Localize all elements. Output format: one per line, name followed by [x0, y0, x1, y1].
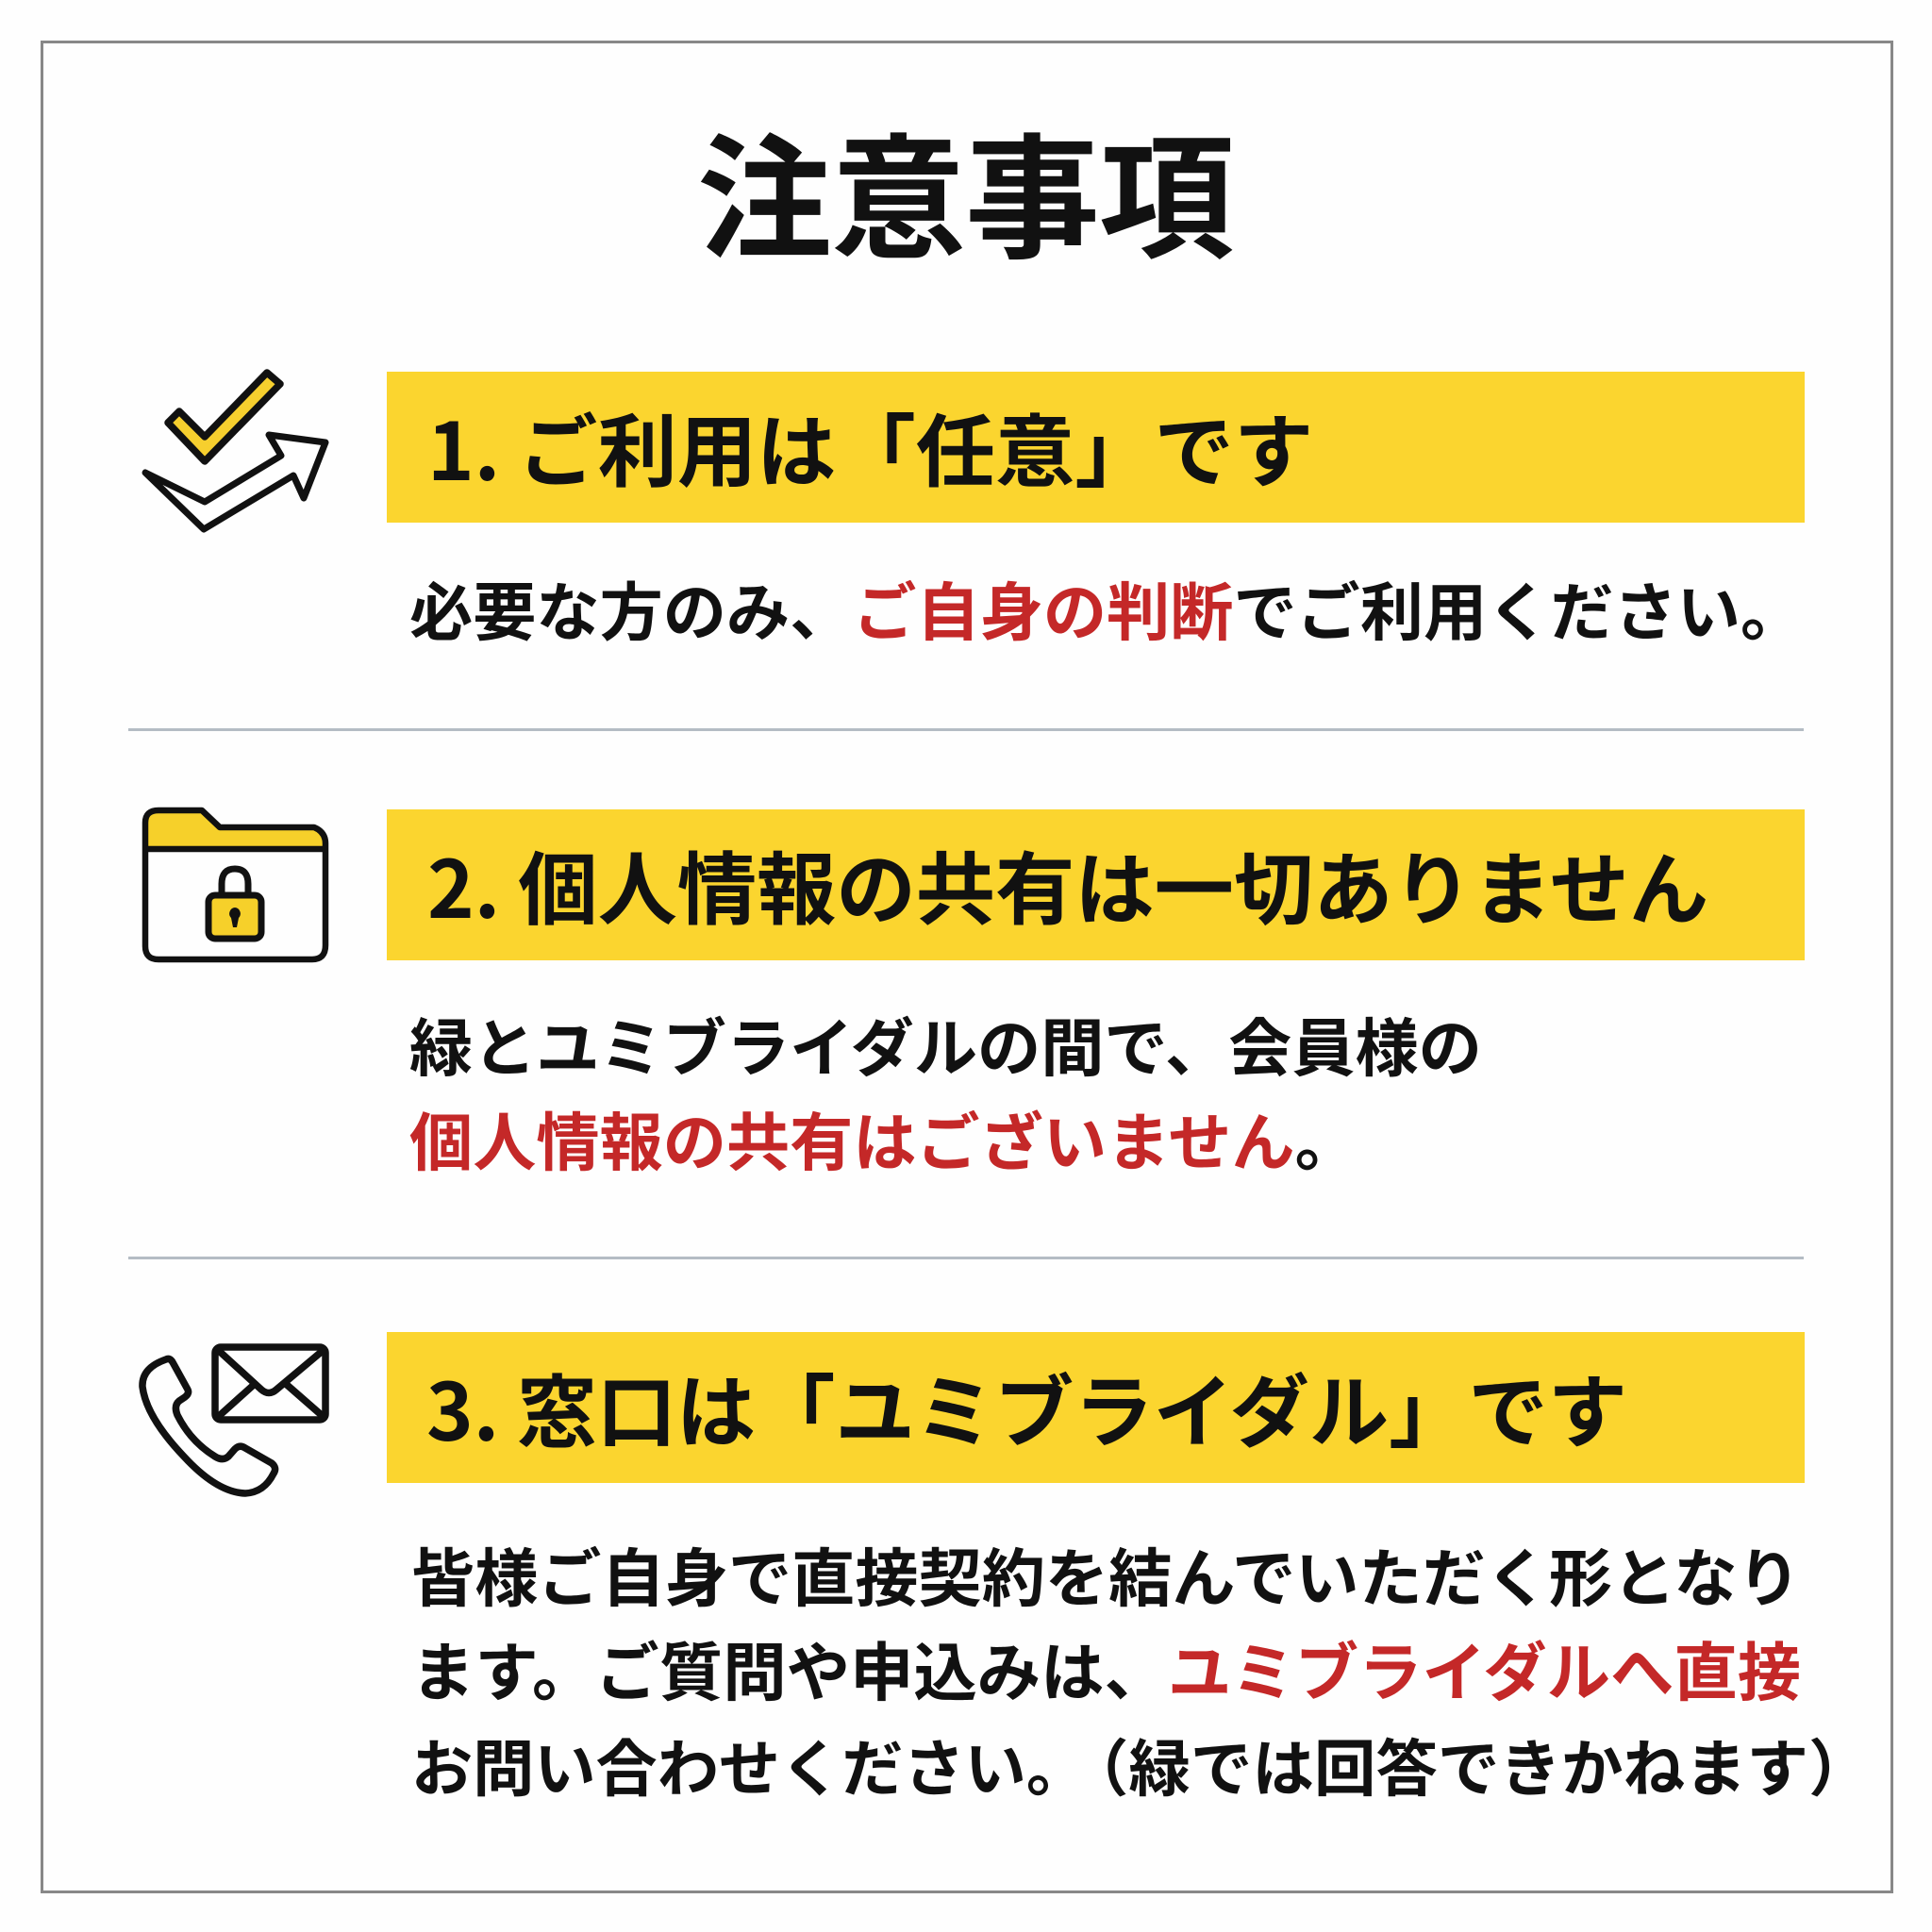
- heading 1: 1. ご利用は「任意」です: [427, 389, 1313, 504]
- heading bar 1: [387, 372, 1805, 523]
- heading bar 2: [387, 809, 1805, 960]
- body text 2: 緑とユミブライダルの間で、会員様の: [409, 1014, 1482, 1085]
- heading 3: 3. 窓口は「ユミブライダル」です: [426, 1349, 1627, 1464]
- title: 注意事項: [697, 92, 1233, 287]
- icon: phone and envelope: [139, 1343, 329, 1497]
- body text 2: [409, 1014, 1482, 1179]
- body text 3: お問い合わせください。: [411, 1735, 1088, 1804]
- body text 3: ます。ご質問や申込みは、ユミブライダルへ直接: [411, 1639, 1801, 1709]
- heading bar 3: [387, 1332, 1805, 1483]
- icon: folder with lock: [142, 808, 328, 962]
- body text 1: 必要な方のみ、ご自身の判断でご利用ください。: [409, 578, 1804, 649]
- body text 2: 個人情報の共有はございません。: [409, 1108, 1358, 1179]
- body text 3: [411, 1544, 1871, 1804]
- body text 3: （緑では回答できかねます）: [1067, 1735, 1871, 1804]
- heading 2: 2. 個人情報の共有は一切ありません: [427, 826, 1708, 941]
- body text 3: 皆様ご自身で直接契約を結んでいただく形となり: [411, 1544, 1801, 1615]
- icon: check and arrow: [142, 369, 328, 533]
